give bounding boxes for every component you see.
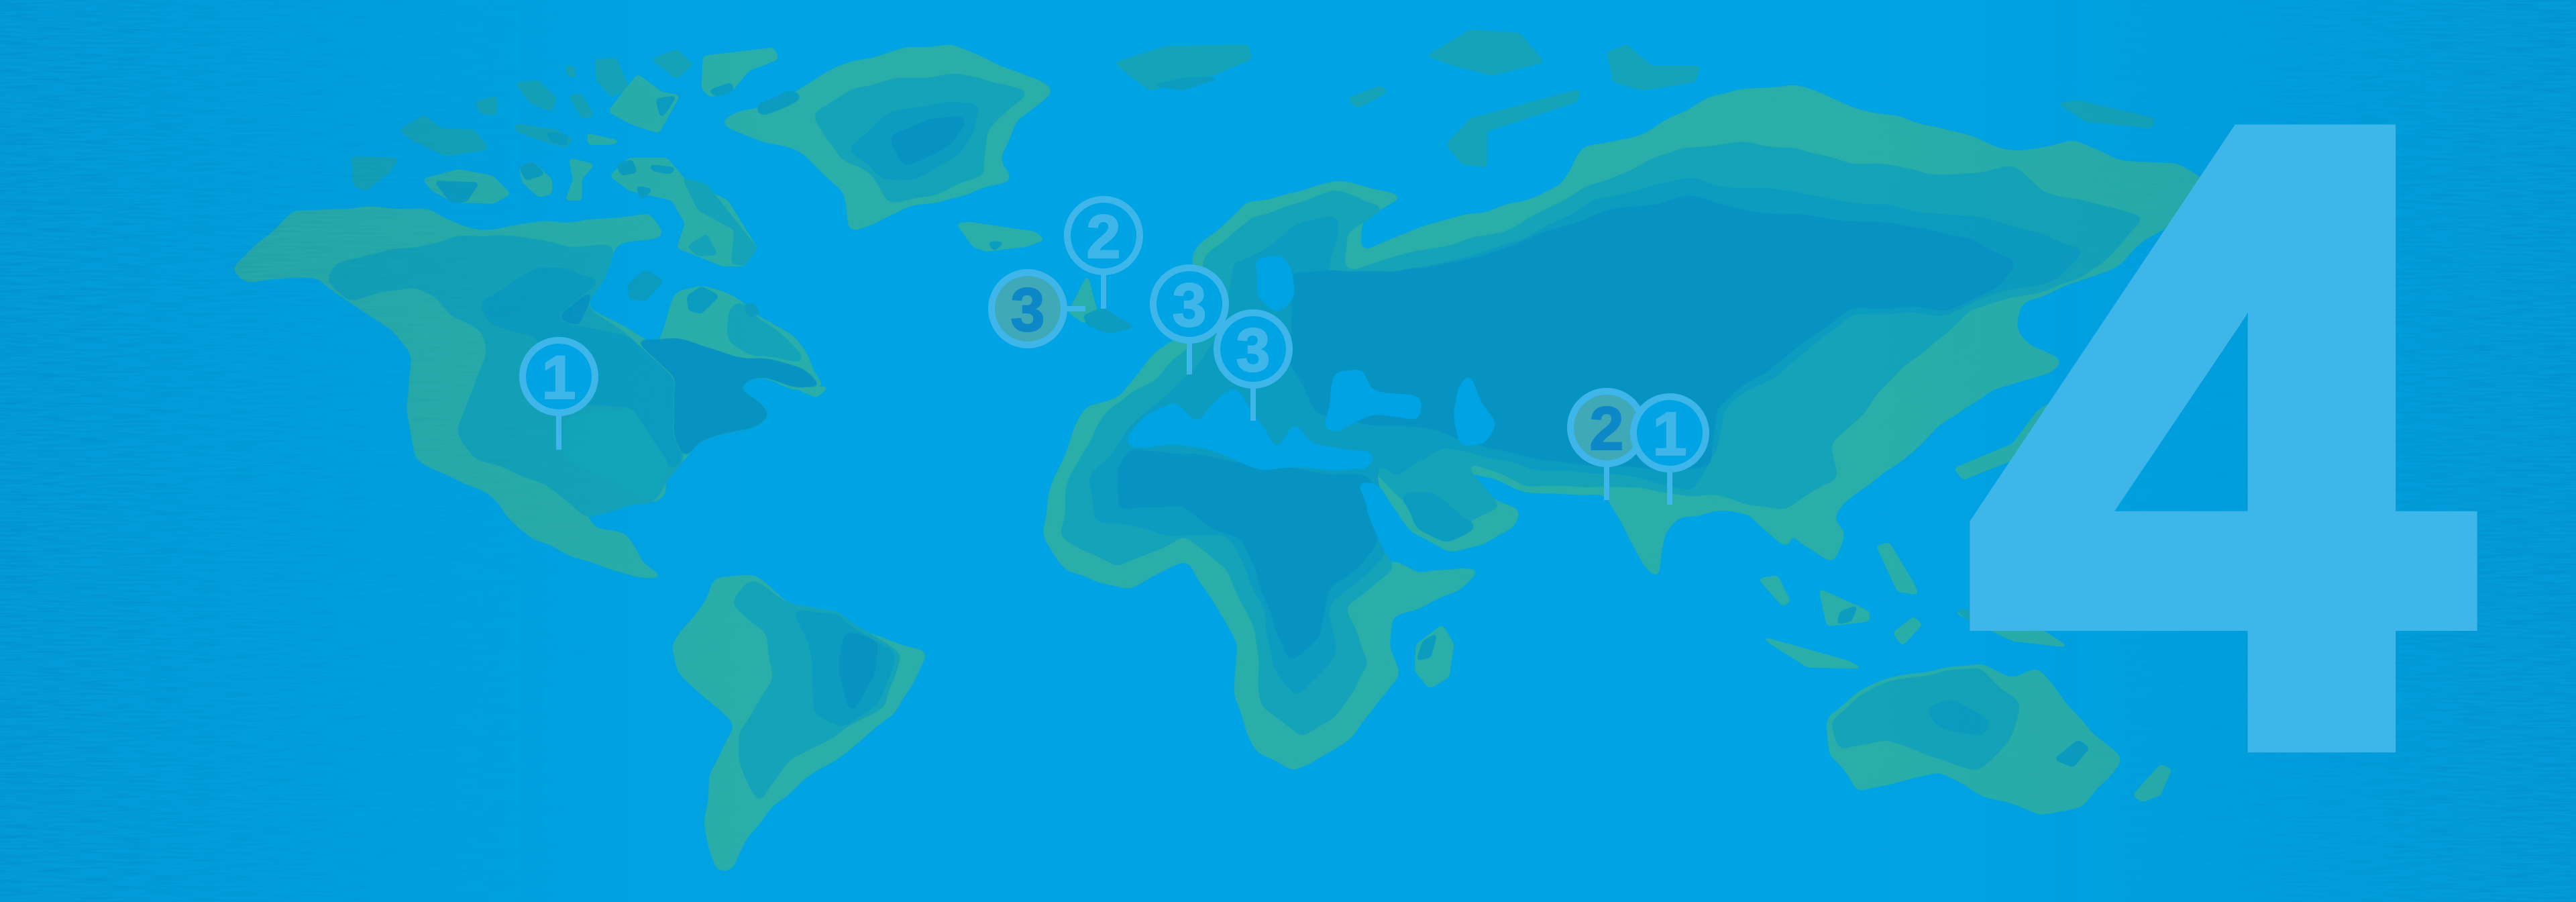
- land: Australia and New Zealand: [1827, 660, 2125, 819]
- pin: 1 South Asia: 1: [1652, 400, 1687, 468]
- pin: 2 United Kingdom: 2: [1086, 203, 1121, 271]
- inland seas: [1126, 252, 1498, 575]
- pin: 3 Ireland: 3: [1010, 276, 1045, 344]
- pin: 1 South Asia: [1633, 397, 1706, 505]
- pin: 2 South Asia: [1570, 391, 1643, 500]
- pin: 2 South Asia: 2: [1589, 395, 1624, 463]
- land: South America: [669, 575, 928, 871]
- land: Australian details and New Zealand: [2053, 740, 2172, 802]
- land: northern islands: [1114, 30, 2155, 168]
- land: Baffin Island: [610, 158, 757, 266]
- pin: 3 Italy: [1217, 313, 1289, 421]
- pin: 1 North America: [523, 340, 595, 450]
- world map: [227, 30, 2210, 871]
- land: North America: [227, 209, 830, 587]
- land: Canadian lakes: [628, 270, 830, 398]
- land: Southeast Asian islands: [1727, 396, 2070, 669]
- land: Arctic islands: [352, 48, 779, 204]
- pin: 3 France: [1153, 268, 1226, 374]
- land: Madagascar: [1415, 625, 1454, 689]
- land: Iceland and UK: [956, 222, 1135, 334]
- land: Eurasia and Africa: [1042, 85, 2210, 772]
- pin: 3 Ireland: [991, 272, 1085, 345]
- pin: 3 Italy: 3: [1236, 316, 1271, 385]
- land: Greenland: [716, 46, 1055, 230]
- pin: 3 France: 3: [1172, 271, 1207, 340]
- pin: 2 United Kingdom: [1067, 199, 1140, 309]
- pin: 1 North America: 1: [541, 344, 576, 412]
